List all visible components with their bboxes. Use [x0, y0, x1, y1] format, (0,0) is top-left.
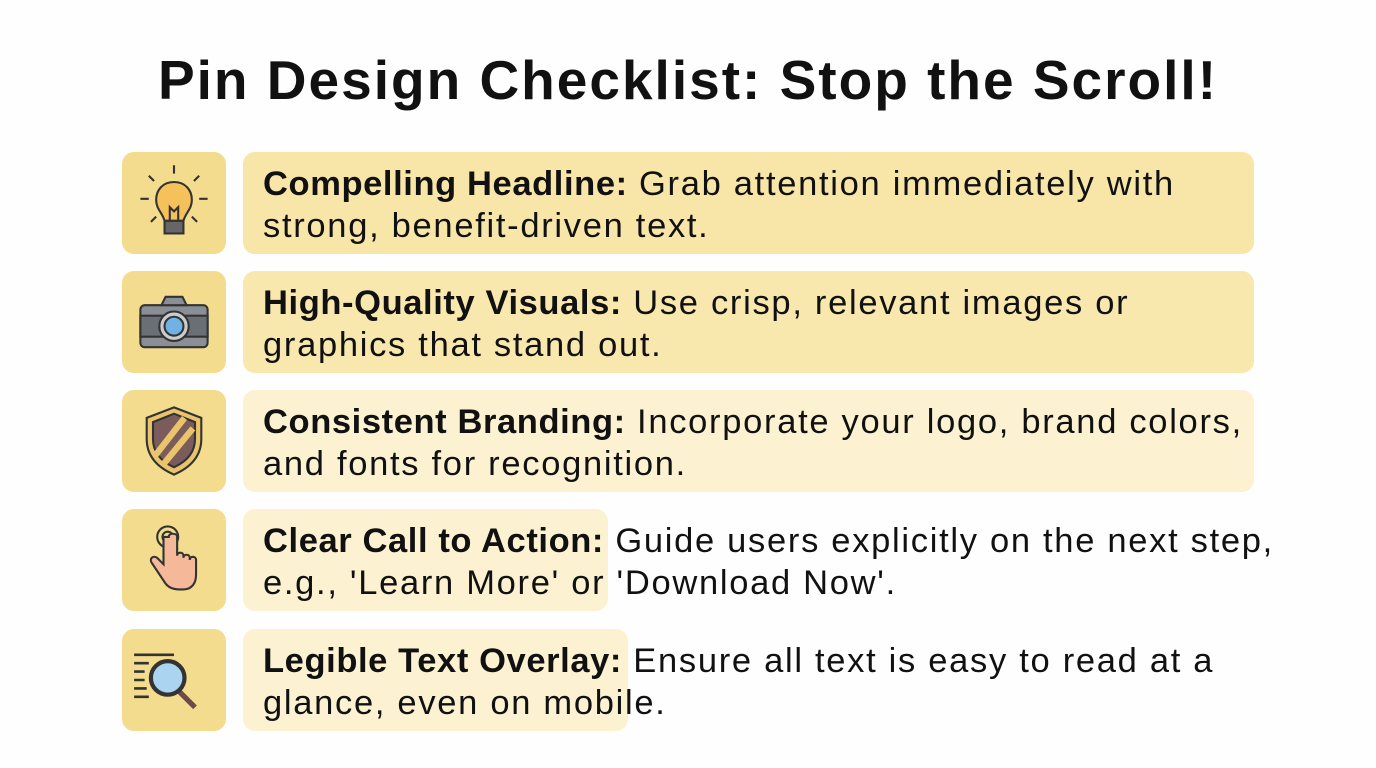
row 3 text: Consistent Branding: Incorporate your logo, brand colors, [263, 403, 1243, 441]
row 2 text box [243, 271, 1254, 373]
row 4 text box [243, 509, 608, 611]
row 3 text [263, 403, 1243, 483]
row 4 text: e.g., 'Learn More' or 'Download Now'. [263, 564, 897, 602]
row 3 icon: shield [122, 390, 226, 492]
row 1 text: strong, benefit-driven text. [263, 207, 709, 245]
row 5 text box [243, 629, 628, 731]
row 1 text [263, 165, 1175, 245]
row 4 text [263, 522, 1274, 602]
row 2 text: graphics that stand out. [263, 326, 662, 364]
row 2 text [263, 284, 1129, 364]
row 2 text: High-Quality Visuals: Use crisp, relevant images or [263, 284, 1129, 322]
row 5 text [263, 642, 1214, 722]
row 4 icon: pointing hand [122, 509, 226, 611]
row 5 text: Legible Text Overlay: Ensure all text is easy to read at a [263, 642, 1214, 680]
row 5 icon: magnifier over text [122, 629, 226, 731]
row 4 text: Clear Call to Action: Guide users explicitly on the next step, [263, 522, 1274, 560]
title: Pin Design Checklist: Stop the Scroll! [158, 49, 1218, 111]
row 1 text box [243, 152, 1254, 254]
row 1 text: Compelling Headline: Grab attention immediately with [263, 165, 1175, 203]
row 3 text box [243, 390, 1254, 492]
row 3 text: and fonts for recognition. [263, 445, 687, 483]
row 2 icon: camera [122, 271, 226, 373]
row 5 text: glance, even on mobile. [263, 684, 667, 722]
row 1 icon: light bulb [122, 152, 226, 254]
